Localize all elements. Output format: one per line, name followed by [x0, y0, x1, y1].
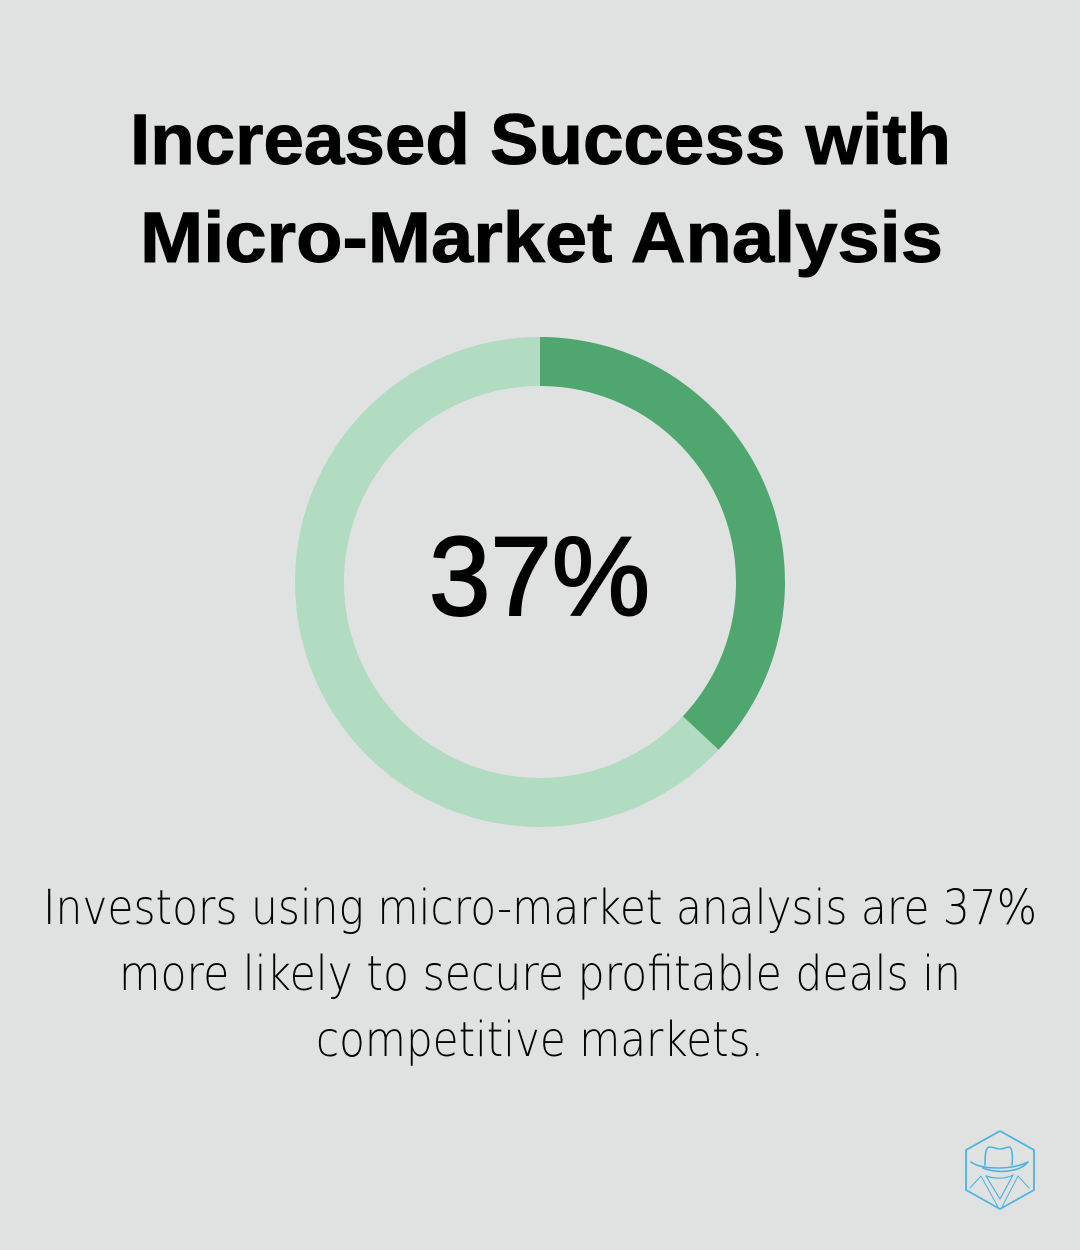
highlighted segment: 37 percent — [540, 337, 785, 750]
description text — [43, 880, 1037, 1068]
center value: 37% — [429, 514, 650, 639]
title: Micro-Market Analysis — [140, 199, 943, 278]
title: Increased Success with — [130, 101, 951, 180]
title — [130, 101, 951, 278]
description text: more likely to secure profitable deals in — [119, 946, 961, 1002]
donut chart: 37% — [320, 337, 785, 802]
description text: competitive markets. — [316, 1012, 764, 1068]
icon: hexagon spy logo — [966, 1131, 1034, 1209]
